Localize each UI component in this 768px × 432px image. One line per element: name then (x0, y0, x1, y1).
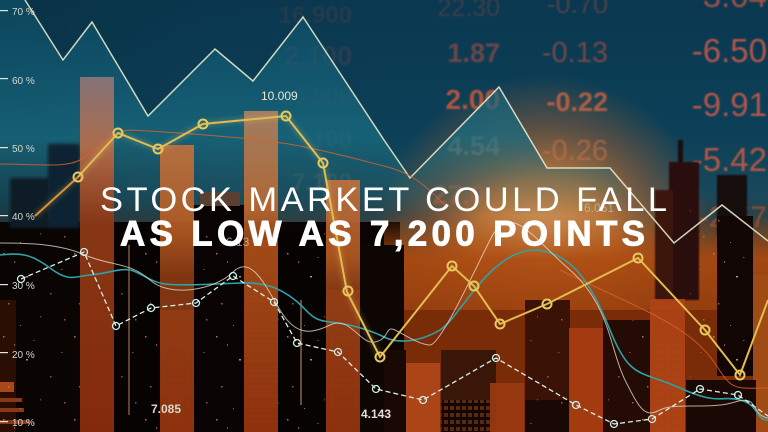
background ticker numbers: -0.26 (542, 135, 608, 167)
background ticker numbers: -0.22 (546, 87, 608, 117)
background ticker numbers: 1.87 (447, 38, 500, 68)
chart data labels (151, 89, 614, 421)
chart data labels: 7.085 (151, 402, 181, 416)
percentage axis: 50 % (12, 144, 35, 155)
city skyline (0, 140, 768, 432)
percentage axis: 20 % (12, 350, 35, 361)
right dark towers (525, 300, 570, 432)
bar 4 (326, 180, 360, 432)
background ticker numbers: 7.100 (292, 169, 352, 196)
line: teal curve (0, 250, 768, 420)
percentage axis: 10 % (12, 418, 35, 429)
line: thin orange curve (0, 130, 768, 388)
background ticker numbers: -6.50 (692, 32, 767, 69)
lower city base left (0, 222, 400, 432)
percentage axis (0, 7, 35, 429)
line: white peaks (25, 0, 768, 243)
title line 1: STOCK MARKET COULD FALL (100, 181, 667, 219)
left towers (10, 178, 50, 228)
background ticker numbers: 27.00 (432, 180, 500, 210)
background ticker numbers: 2.100 (284, 41, 352, 71)
bar 5 (406, 363, 440, 432)
chart data labels: 10.009 (261, 89, 298, 103)
line: dashed teal with markers (18, 248, 768, 428)
percentage axis: 60 % (12, 76, 35, 87)
middle orange towers (160, 310, 194, 432)
bar 6 (490, 383, 524, 432)
bar 1 (80, 77, 114, 432)
percentage axis: 40 % (12, 212, 35, 223)
windows (0, 222, 80, 432)
background ticker numbers: 16.900 (279, 2, 352, 29)
background ticker numbers: -2.57 (699, 201, 767, 234)
chart data labels: 6.13 (226, 235, 250, 249)
percentage axis: 30 % (12, 281, 35, 292)
bar chart (80, 77, 685, 432)
percentage axis: 70 % (12, 7, 35, 18)
line: thin white curve (0, 222, 768, 418)
bar 3 (244, 111, 278, 432)
bar 7 (569, 328, 603, 432)
chart data labels: 4.143 (361, 407, 391, 421)
background ticker numbers (279, 0, 767, 234)
lower city base right (384, 216, 768, 432)
background ticker numbers: -0.13 (542, 37, 608, 69)
chart data labels: 6.051 (584, 201, 614, 215)
background ticker numbers: 100 (312, 126, 352, 153)
title (100, 181, 667, 254)
line: yellow with markers (35, 112, 768, 380)
bar 8 (650, 299, 685, 432)
teal area under the white line (0, 0, 640, 216)
background ticker numbers: -9.91 (692, 86, 767, 123)
background ticker numbers: 2.00 (446, 84, 500, 115)
background ticker numbers: -5.42 (692, 141, 767, 178)
bar 2 (160, 145, 194, 432)
title line 2: AS LOW AS 7,200 POINTS (120, 214, 645, 254)
background ticker numbers: 4.54 (447, 131, 500, 161)
background ticker numbers: 10.000 (279, 84, 352, 111)
